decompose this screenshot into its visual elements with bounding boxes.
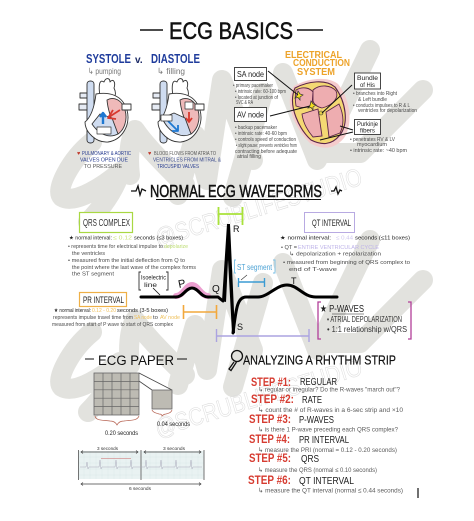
caption: diastole: ♥ [148,151,152,157]
panel: bundle of His: • branches into Right [353,91,397,97]
panel: P-waves [318,302,411,339]
panel: SA node: • intrinsic rate: 60-100 bpm [235,89,286,95]
panel: P-waves: ★ P-WAVES [320,304,364,315]
chart: 6-second rhythm strip: 6 seconds [129,486,152,492]
panel: PR interval: to [153,315,158,321]
panel: AV node: AV node [237,110,264,120]
caption: systole: PULMONARY & AORTIC [82,151,131,157]
caption: systole [77,151,131,170]
panel: QRS complex: ★ normal interval: [69,234,112,242]
panel: QRS complex: • represents time for electrical impulse to [68,244,163,250]
panel: AV node [234,108,297,160]
caption: diastole: BLOOD FLOWS FROM ATRIA TO [154,151,216,157]
step 4: PR interval [249,434,397,454]
panel: QT interval: • measured from beginning of QRS complex to [283,260,410,266]
panel: QRS complex: seconds (≤3 boxes) [134,236,183,242]
label: ST segment [234,260,275,280]
step 6: QT interval: ↳ measure the QT interval (normal ≤ 0.44 seconds) [258,488,403,494]
panel: AV node: atrial filling [237,154,261,160]
label: isoelectric line [139,272,168,295]
chart: 5x5 ECG grid: 0.04 seconds [157,421,191,428]
panel: Purkinje fibers: Purkinje [357,122,379,128]
label: isoelectric line: Isoelectric [141,276,166,282]
heading: ECG paper: ECG PAPER [98,353,174,368]
panel: QRS complex: the ST segment [72,272,114,278]
step 1: regular: STEP #1: [251,377,291,389]
panel: QT interval: QT INTERVAL [312,218,351,229]
step 2: rate: STEP #2: [251,394,294,406]
panel: PR interval: SA node [134,315,152,321]
bracket: QRS duration [218,207,242,225]
panel: QRS complex: depolarize [164,244,188,250]
heading: normal ECG waveforms: NORMAL ECG WAVEFORMS [150,181,322,201]
chart: ECG waveform: Q [212,284,220,295]
panel: QT interval: ↳ depolarization + repolarization [289,250,381,258]
panel: AV node: • slight pause: prevents ventricles from [236,143,297,149]
panel: AV node: contracting before adequate [235,149,297,155]
chart: 6-second rhythm strip: 3 seconds [97,446,119,452]
chart: ECG waveform: T [291,276,297,286]
step 3: p-waves [249,414,398,434]
panel: AV node: • intrinsic rate: 40-60 bpm [235,131,287,137]
watermark: SAMPLE scrawl upper [60,50,423,222]
watermark: SAMPLE scrawl lower [60,240,423,412]
step 5: QRS: QRS [301,454,319,465]
chart: ECG waveform: P [177,278,187,291]
panel: SA node: • located at junction of [235,95,278,101]
caption: systole: VALVES OPEN DUE [80,158,128,164]
chart: ECG waveform: S [237,322,243,332]
caption: diastole: VENTRICLES FROM MITRAL & [153,158,221,164]
step 5: QRS [249,453,377,474]
panel: PR interval: PR INTERVAL [83,295,124,305]
panel: bundle of His [353,73,417,114]
panel: bundle of His: of His [360,83,375,89]
chart: ECG waveform: R [233,224,240,234]
panel: QT interval: ENTIRE VENTRICULAR CYCLE [298,245,379,251]
caption: systole: TO PRESSURE [84,164,122,170]
step 1: regular: ↳ regular or irregular? Do the R-waves "march out"? [258,386,400,394]
icon: heart in diastole [152,79,204,143]
heading: systole v. diastole: ↳ filling [157,66,185,76]
step 2: rate [251,394,403,414]
step 4: PR interval: STEP #4: [249,434,290,446]
panel: AV node: • controls speed of conduction [235,137,296,143]
panel: QT interval: seconds (≤11 boxes) [355,236,410,242]
panel: P-waves: • ATRIAL DEPOLARIZATION [327,315,402,324]
step 5: QRS: ↳ measure the QRS (normal ≤ 0.10 seconds) [258,467,377,474]
panel: Purkinje fibers [350,120,407,154]
chart: 5x5 ECG grid: 0.20 seconds [105,430,139,437]
panel: bundle of His: • conducts impulses to R & L [353,103,410,109]
heading: electrical conduction system [285,49,350,78]
panel: QT interval: ≤ 0.44 [336,236,353,242]
panel: SA node: • primary pacemaker [233,83,273,89]
title: ECG BASICS [169,18,293,45]
heading: electrical conduction system: ELECTRICAL [285,49,342,61]
step 4: PR interval: PR INTERVAL [299,435,349,446]
caption: diastole: TRICUSPID VALVES [157,164,199,170]
panel: PR interval: measured from start of P wave to start of QRS complex [52,322,173,328]
heading: electrical conduction system: SYSTEM [297,66,335,78]
heading: systole v. diastole: SYSTOLE [86,52,131,66]
panel: QT interval: ★ normal interval: [280,234,332,242]
panel: QRS complex: QRS COMPLEX [83,218,130,229]
panel: QT interval: • QT = [281,245,297,251]
panel: AV node: • backup pacemaker [235,125,277,131]
panel: QRS complex: the ventricles [72,251,105,257]
icon: magnifying glass [229,350,242,370]
step 3: p-waves: STEP #3: [249,414,291,426]
icon: conduction heart [268,71,353,148]
panel: Purkinje fibers: myocardium [357,142,387,148]
panel: PR interval: AV node [160,315,180,321]
step 2: rate: RATE [302,395,322,406]
page number mark [417,488,419,498]
step 1: regular [251,377,400,394]
panel: SA node: SA node [237,70,264,79]
panel: Purkinje fibers: • intrinsic rate: ~40 bpm [350,148,407,154]
heading: analyzing a rhythm strip: ANALYZING A RHYTHM STRIP [243,352,396,368]
watermark: handle text upper: @SCRUBLIFESTUDIO [152,163,365,253]
panel: PR interval: seconds (3-5 boxes) [117,308,168,314]
chart: 6-second rhythm strip [78,446,204,492]
panel: PR interval: 0.12 - 0.20 [92,308,116,314]
step 3: p-waves: P-WAVES [299,415,334,426]
bracket: QT interval [216,329,309,342]
chart: 5x5 ECG grid [94,373,191,437]
step 5: QRS: STEP #5: [249,453,291,465]
heading: systole v. diastole: ↳ pumping [88,66,121,76]
step 4: PR interval: ↳ measure the PRI (normal = 0.12 - 0.20 seconds) [258,447,397,454]
panel: QRS complex: the point where the last wave of the complex forms [72,265,196,271]
label: ST segment: ST segment [237,262,272,272]
panel: QT interval [280,212,410,273]
panel: bundle of His: Bundle [357,76,379,82]
caption: diastole [148,151,221,170]
panel: QRS complex: • measured from the initial deflection from Q to [68,258,185,264]
panel: SA node [233,68,286,106]
label: isoelectric line: line [144,283,158,289]
panel: bundle of His: ventricles for depolarization [358,108,417,114]
step 1: regular: REGULAR [300,377,337,388]
panel: bundle of His: & Left bundle [358,97,387,103]
step 6: QT interval: STEP #6: [248,475,291,487]
heading: systole v. diastole: v. [135,55,143,66]
panel: Purkinje fibers: • penetrates RV & LV [350,137,395,143]
bracket: ST segment [238,278,264,287]
heading: systole v. diastole: DIASTOLE [151,52,200,66]
step 6: QT interval [248,475,403,494]
panel: QT interval: end of T-wave [289,267,337,273]
panel: PR interval [52,292,180,328]
chart: 6-second rhythm strip: 3 seconds [163,446,186,452]
step 2: rate: ↳ count the # of R-waves in a 6-sec strip and ×10 [258,407,403,414]
panel: SA node: SVC & RA [236,100,253,106]
panel: Purkinje fibers: fibers [360,128,375,134]
panel: PR interval: ★ normal interval: [54,307,91,314]
chart: ECG waveform [141,224,337,333]
icon: heart in systole [79,79,131,143]
panel: PR interval: represents impulse travel time from [53,315,133,321]
panel: QRS complex: ≤ 0.12 [113,236,132,242]
bracket: PR interval [184,305,216,319]
step 3: p-waves: ↳ is there 1 P-wave preceding each QRS complex? [258,426,398,434]
panel: P-waves: • 1:1 relationship w/QRS [327,325,407,334]
caption: systole: ♥ [77,151,81,157]
heading: electrical conduction system: CONDUCTION [293,57,350,69]
panel: QRS complex [68,212,196,278]
watermark: handle text lower: @SCRUBLIFESTUDIO [152,353,365,443]
heading: systole v. diastole [86,52,200,76]
step 6: QT interval: QT INTERVAL [299,476,354,487]
